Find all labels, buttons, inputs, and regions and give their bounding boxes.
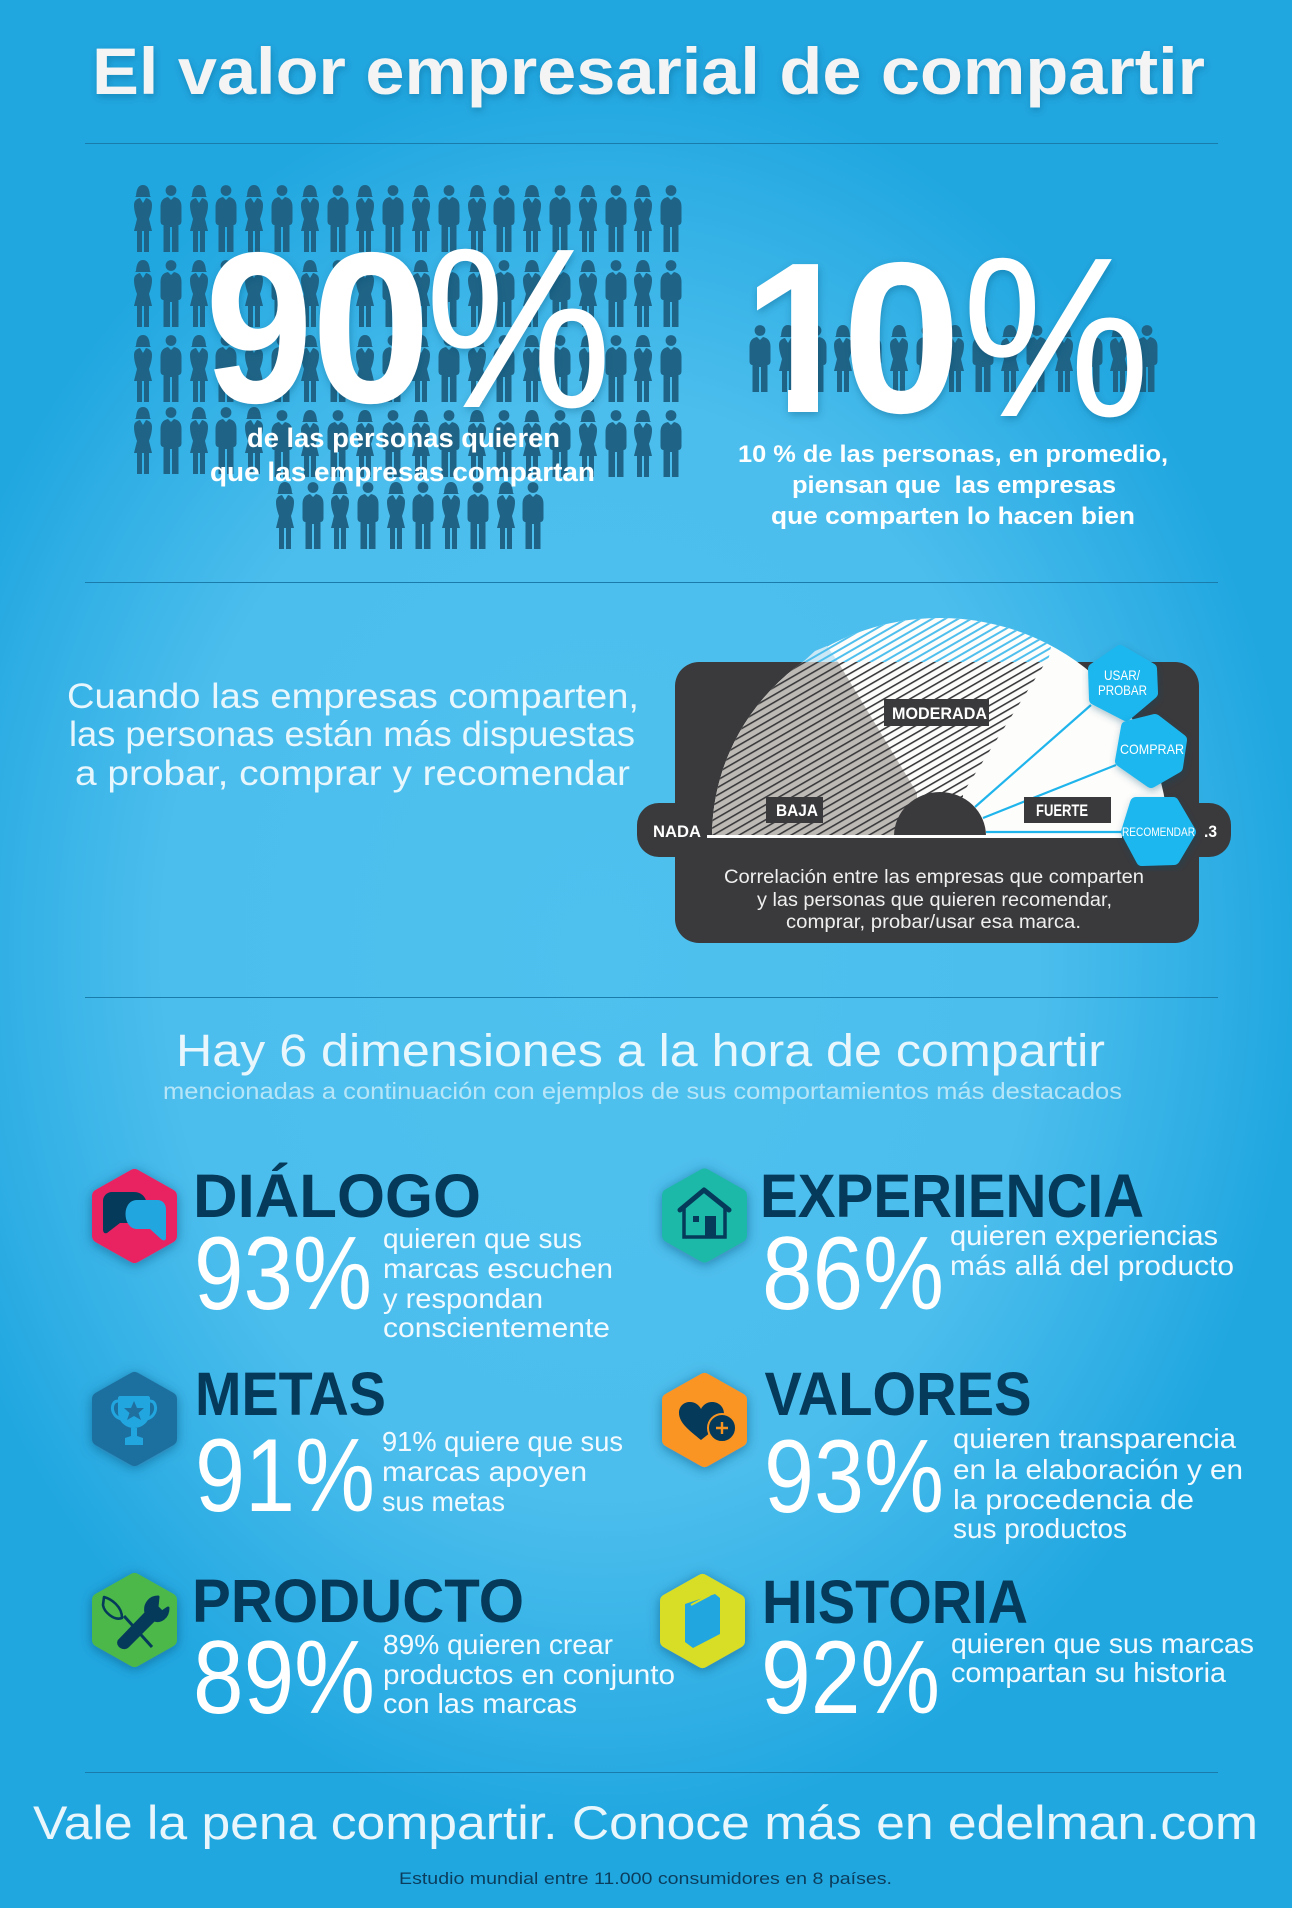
description <box>383 1223 613 1343</box>
hexagon: recomendar <box>1122 803 1195 860</box>
description: en la elaboración y en <box>953 1454 1243 1485</box>
percentage: 92% <box>761 1620 940 1736</box>
heading: EXPERIENCIA <box>760 1162 1144 1230</box>
description <box>382 1426 623 1517</box>
description: productos en conjunto <box>383 1659 675 1690</box>
hexagon: usar probar <box>1094 651 1152 715</box>
percentage: 89% <box>193 1620 375 1736</box>
dimension: historia <box>667 1568 1254 1736</box>
description: con las marcas <box>383 1688 577 1719</box>
heading: VALORES <box>764 1360 1032 1428</box>
percentage: 91% <box>195 1418 375 1534</box>
description: quieren transparencia <box>953 1423 1236 1454</box>
icon: book <box>667 1581 738 1661</box>
description: quieren que sus <box>383 1223 582 1254</box>
dark panel <box>637 662 1231 943</box>
semicircle gauge <box>712 618 1168 836</box>
description: y respondan <box>383 1283 543 1314</box>
description <box>953 1423 1243 1544</box>
hexagon: usar probar: PROBAR <box>1098 682 1147 698</box>
caption: 10% <box>738 441 1168 530</box>
label: fuerte: FUERTE <box>1036 801 1088 820</box>
dimension: dialogo <box>99 1162 613 1343</box>
people grid: 90 percent <box>134 185 682 549</box>
stat: 10%: 0 <box>842 217 961 458</box>
stat: 90%: 9 <box>205 207 313 448</box>
hexagon: comprar <box>1120 720 1184 782</box>
stat: 90%: % <box>425 202 612 456</box>
description: sus metas <box>382 1486 505 1517</box>
description: quieren que sus marcas <box>951 1628 1254 1659</box>
stat: 10%: % <box>962 211 1150 465</box>
section heading <box>163 1025 1122 1104</box>
label: nada: NADA <box>653 822 701 841</box>
dimension: producto <box>99 1567 675 1736</box>
gauge caption <box>724 867 1144 933</box>
label: moderada <box>884 699 989 726</box>
icon: wrench and brush <box>99 1580 170 1660</box>
heading: DIÁLOGO <box>193 1162 481 1230</box>
footer call to action: Vale la pena compartir. Conoce más en edelman.com <box>33 1796 1258 1849</box>
statement text <box>67 677 639 793</box>
connector lines <box>975 705 1122 832</box>
label: moderada: MODERADA <box>892 704 987 723</box>
description: más allá del producto <box>950 1250 1234 1281</box>
hexagon: usar probar: USAR/ <box>1104 667 1140 683</box>
caption: 10%: que comparten lo hacen bien <box>771 503 1135 530</box>
statement text: a probar, comprar y recomendar <box>75 754 630 793</box>
caption: 10%: piensan que las empresas <box>792 472 1116 499</box>
description <box>950 1220 1234 1281</box>
percentage: 93% <box>764 1419 944 1535</box>
description: marcas escuchen <box>383 1253 613 1284</box>
description <box>951 1628 1254 1688</box>
label: baja <box>766 797 823 823</box>
gauge caption: y las personas que quieren recomendar, <box>757 890 1112 911</box>
title: El valor empresarial de compartir <box>92 34 1205 108</box>
description <box>383 1629 675 1719</box>
dimension: experiencia <box>669 1162 1234 1332</box>
description: 89% quieren crear <box>383 1629 613 1660</box>
icon: trophy <box>99 1379 170 1459</box>
percentage: 93% <box>194 1216 372 1332</box>
description: la procedencia de <box>953 1484 1194 1515</box>
section heading: Hay 6 dimensiones a la hora de compartir <box>176 1025 1105 1076</box>
description: marcas apoyen <box>382 1456 587 1487</box>
icon: chat bubbles <box>99 1176 170 1256</box>
heading: PRODUCTO <box>192 1567 524 1635</box>
percentage: 86% <box>762 1216 944 1332</box>
statement text: Cuando las empresas comparten, <box>67 677 639 716</box>
label: fuerte <box>1024 797 1111 823</box>
description: conscientemente <box>383 1312 610 1343</box>
panel: correlation gauge <box>637 618 1231 943</box>
label: .3: .3 <box>1204 822 1217 841</box>
heading: METAS <box>195 1360 386 1428</box>
hexagon: comprar: COMPRAR <box>1120 741 1184 757</box>
description: compartan su historia <box>951 1657 1226 1688</box>
stat: 90%: 0 <box>311 207 431 448</box>
icon: house <box>669 1176 740 1256</box>
description: quieren experiencias <box>950 1220 1218 1251</box>
icon: heart plus <box>669 1380 740 1460</box>
caption: 90%: de las personas quieren <box>247 423 560 453</box>
section heading: mencionadas a continuación con ejemplos de sus comportamientos más destacados <box>163 1078 1122 1104</box>
stat: 90% <box>205 202 612 456</box>
dimension: valores <box>669 1360 1243 1544</box>
label: baja: BAJA <box>776 801 818 820</box>
heading: HISTORIA <box>762 1568 1028 1636</box>
description: 91% quiere que sus <box>382 1426 623 1457</box>
footer note: Estudio mundial entre 11.000 consumidores en 8 países. <box>399 1869 892 1888</box>
description: sus productos <box>953 1513 1127 1544</box>
caption: 90%: que las empresas compartan <box>210 457 595 487</box>
caption: 90% <box>210 423 595 487</box>
hexagon: recomendar: RECOMENDAR <box>1122 827 1195 839</box>
dimension: metas <box>99 1360 623 1534</box>
stat: 10%: 1 <box>741 217 861 458</box>
statement text: las personas están más dispuestas <box>69 715 635 754</box>
caption: 10%: 10 % de las personas, en promedio, <box>738 441 1168 468</box>
gauge caption: comprar, probar/usar esa marca. <box>786 912 1081 933</box>
stat: 10% <box>755 258 1146 424</box>
gauge caption: Correlación entre las empresas que comparten <box>724 867 1144 888</box>
people row: 10 percent <box>750 325 1158 392</box>
